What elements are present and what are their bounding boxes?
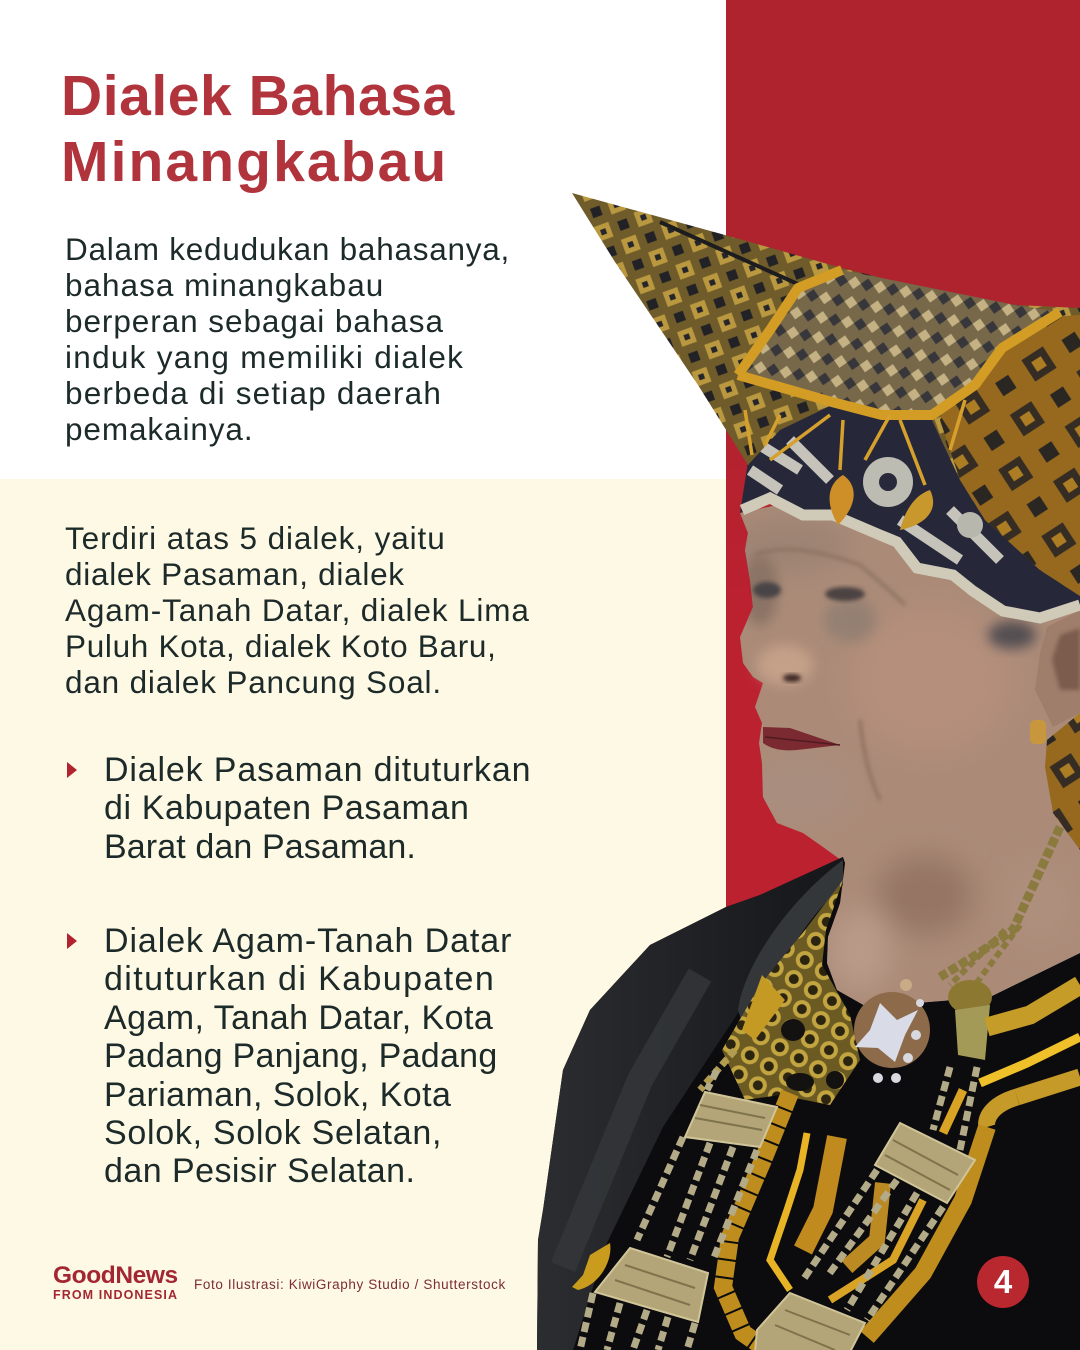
panel: cream background [0, 479, 726, 1350]
photo credit: Foto Ilustrasi: KiwiGraphy Studio / Shutterstock [194, 1277, 506, 1292]
page number badge: 4 [994, 1263, 1012, 1300]
earring [1030, 720, 1046, 744]
gold trim stripes on right [980, 985, 1080, 1127]
text block: Agam-Tanah Datar bullet: Padang Panjang, Padang [104, 1037, 498, 1075]
title [61, 64, 455, 194]
text block: Agam-Tanah Datar bullet: Dialek Agam-Tanah Datar [104, 922, 512, 960]
hat back flap [1045, 713, 1080, 850]
text block: Agam-Tanah Datar bullet [104, 922, 512, 1190]
face and neck [730, 500, 1080, 1007]
text block: intro paragraph [65, 231, 510, 447]
text block: Agam-Tanah Datar bullet: Pariaman, Solok, Kota [104, 1076, 451, 1114]
text block: five dialects paragraph: Puluh Kota, dialek Koto Baru, [65, 628, 497, 664]
inner ear shading [1052, 628, 1080, 690]
gold chain necklace [940, 827, 1060, 977]
text block: Agam-Tanah Datar bullet: Agam, Tanah Datar, Kota [104, 999, 493, 1037]
facial features [753, 549, 905, 800]
text block: five dialects paragraph: Agam-Tanah Datar, dialek Lima [65, 592, 530, 628]
silver chains [580, 1067, 977, 1350]
text block: Pasaman bullet: Dialek Pasaman dituturkan [104, 751, 531, 789]
text block: Pasaman bullet: di Kabupaten Pasaman [104, 789, 469, 827]
text block: five dialects paragraph: dialek Pasaman, dialek [65, 556, 405, 592]
hat gold dangles [745, 400, 965, 530]
text block: Pasaman bullet: Barat dan Pasaman. [104, 828, 416, 866]
photo: woman in Minangkabau traditional dress [537, 193, 1080, 1350]
silver flower brooch [854, 979, 930, 1083]
black velvet garment [537, 857, 1080, 1350]
bullet icon: Pasaman [67, 762, 77, 778]
hat: woven gold tanduk headdress [572, 193, 1080, 596]
text block: five dialects paragraph: dan dialek Pancung Soal. [65, 664, 442, 700]
panel: red background [726, 0, 1080, 930]
logo: GoodNews from Indonesia: GoodNews [53, 1262, 178, 1289]
text block: Pasaman bullet [104, 751, 531, 866]
ear [1035, 610, 1080, 727]
gold plaques [595, 1092, 975, 1350]
text block: Agam-Tanah Datar bullet: dan Pesisir Selatan. [104, 1152, 415, 1190]
text block: intro paragraph: Dalam kedudukan bahasanya, [65, 231, 510, 267]
jacket [537, 857, 843, 1350]
plaque engraving lines [615, 1105, 958, 1350]
text block: intro paragraph: induk yang memiliki dialek [65, 339, 464, 375]
second chain strand [950, 925, 1020, 985]
gold flower ornament [572, 1243, 610, 1290]
text block: intro paragraph: bahasa minangkabau [65, 267, 384, 303]
logo: GoodNews from Indonesia [53, 1262, 178, 1302]
title: Minangkabau [61, 130, 448, 194]
bullet icon: Agam-Tanah Datar [67, 933, 77, 949]
right gold ornaments [948, 980, 992, 1060]
lace headband [740, 400, 1080, 622]
text block: intro paragraph: pemakainya. [65, 411, 254, 447]
title: Dialek Bahasa [61, 64, 455, 128]
text block: Agam-Tanah Datar bullet: dituturkan di Kabupaten [104, 960, 495, 998]
orange gold garlands [723, 1090, 987, 1350]
text block: five dialects paragraph [65, 520, 530, 700]
text block: intro paragraph: berbeda di setiap daerah [65, 375, 442, 411]
logo: GoodNews from Indonesia: FROM INDONESIA [53, 1288, 178, 1302]
page number badge [977, 1256, 1029, 1308]
gold necklace: left filigree band [700, 880, 860, 1105]
text block: intro paragraph: berperan sebagai bahasa [65, 303, 444, 339]
text block: Agam-Tanah Datar bullet: Solok, Solok Selatan, [104, 1114, 442, 1152]
text block: five dialects paragraph: Terdiri atas 5 dialek, yaitu [65, 520, 446, 556]
